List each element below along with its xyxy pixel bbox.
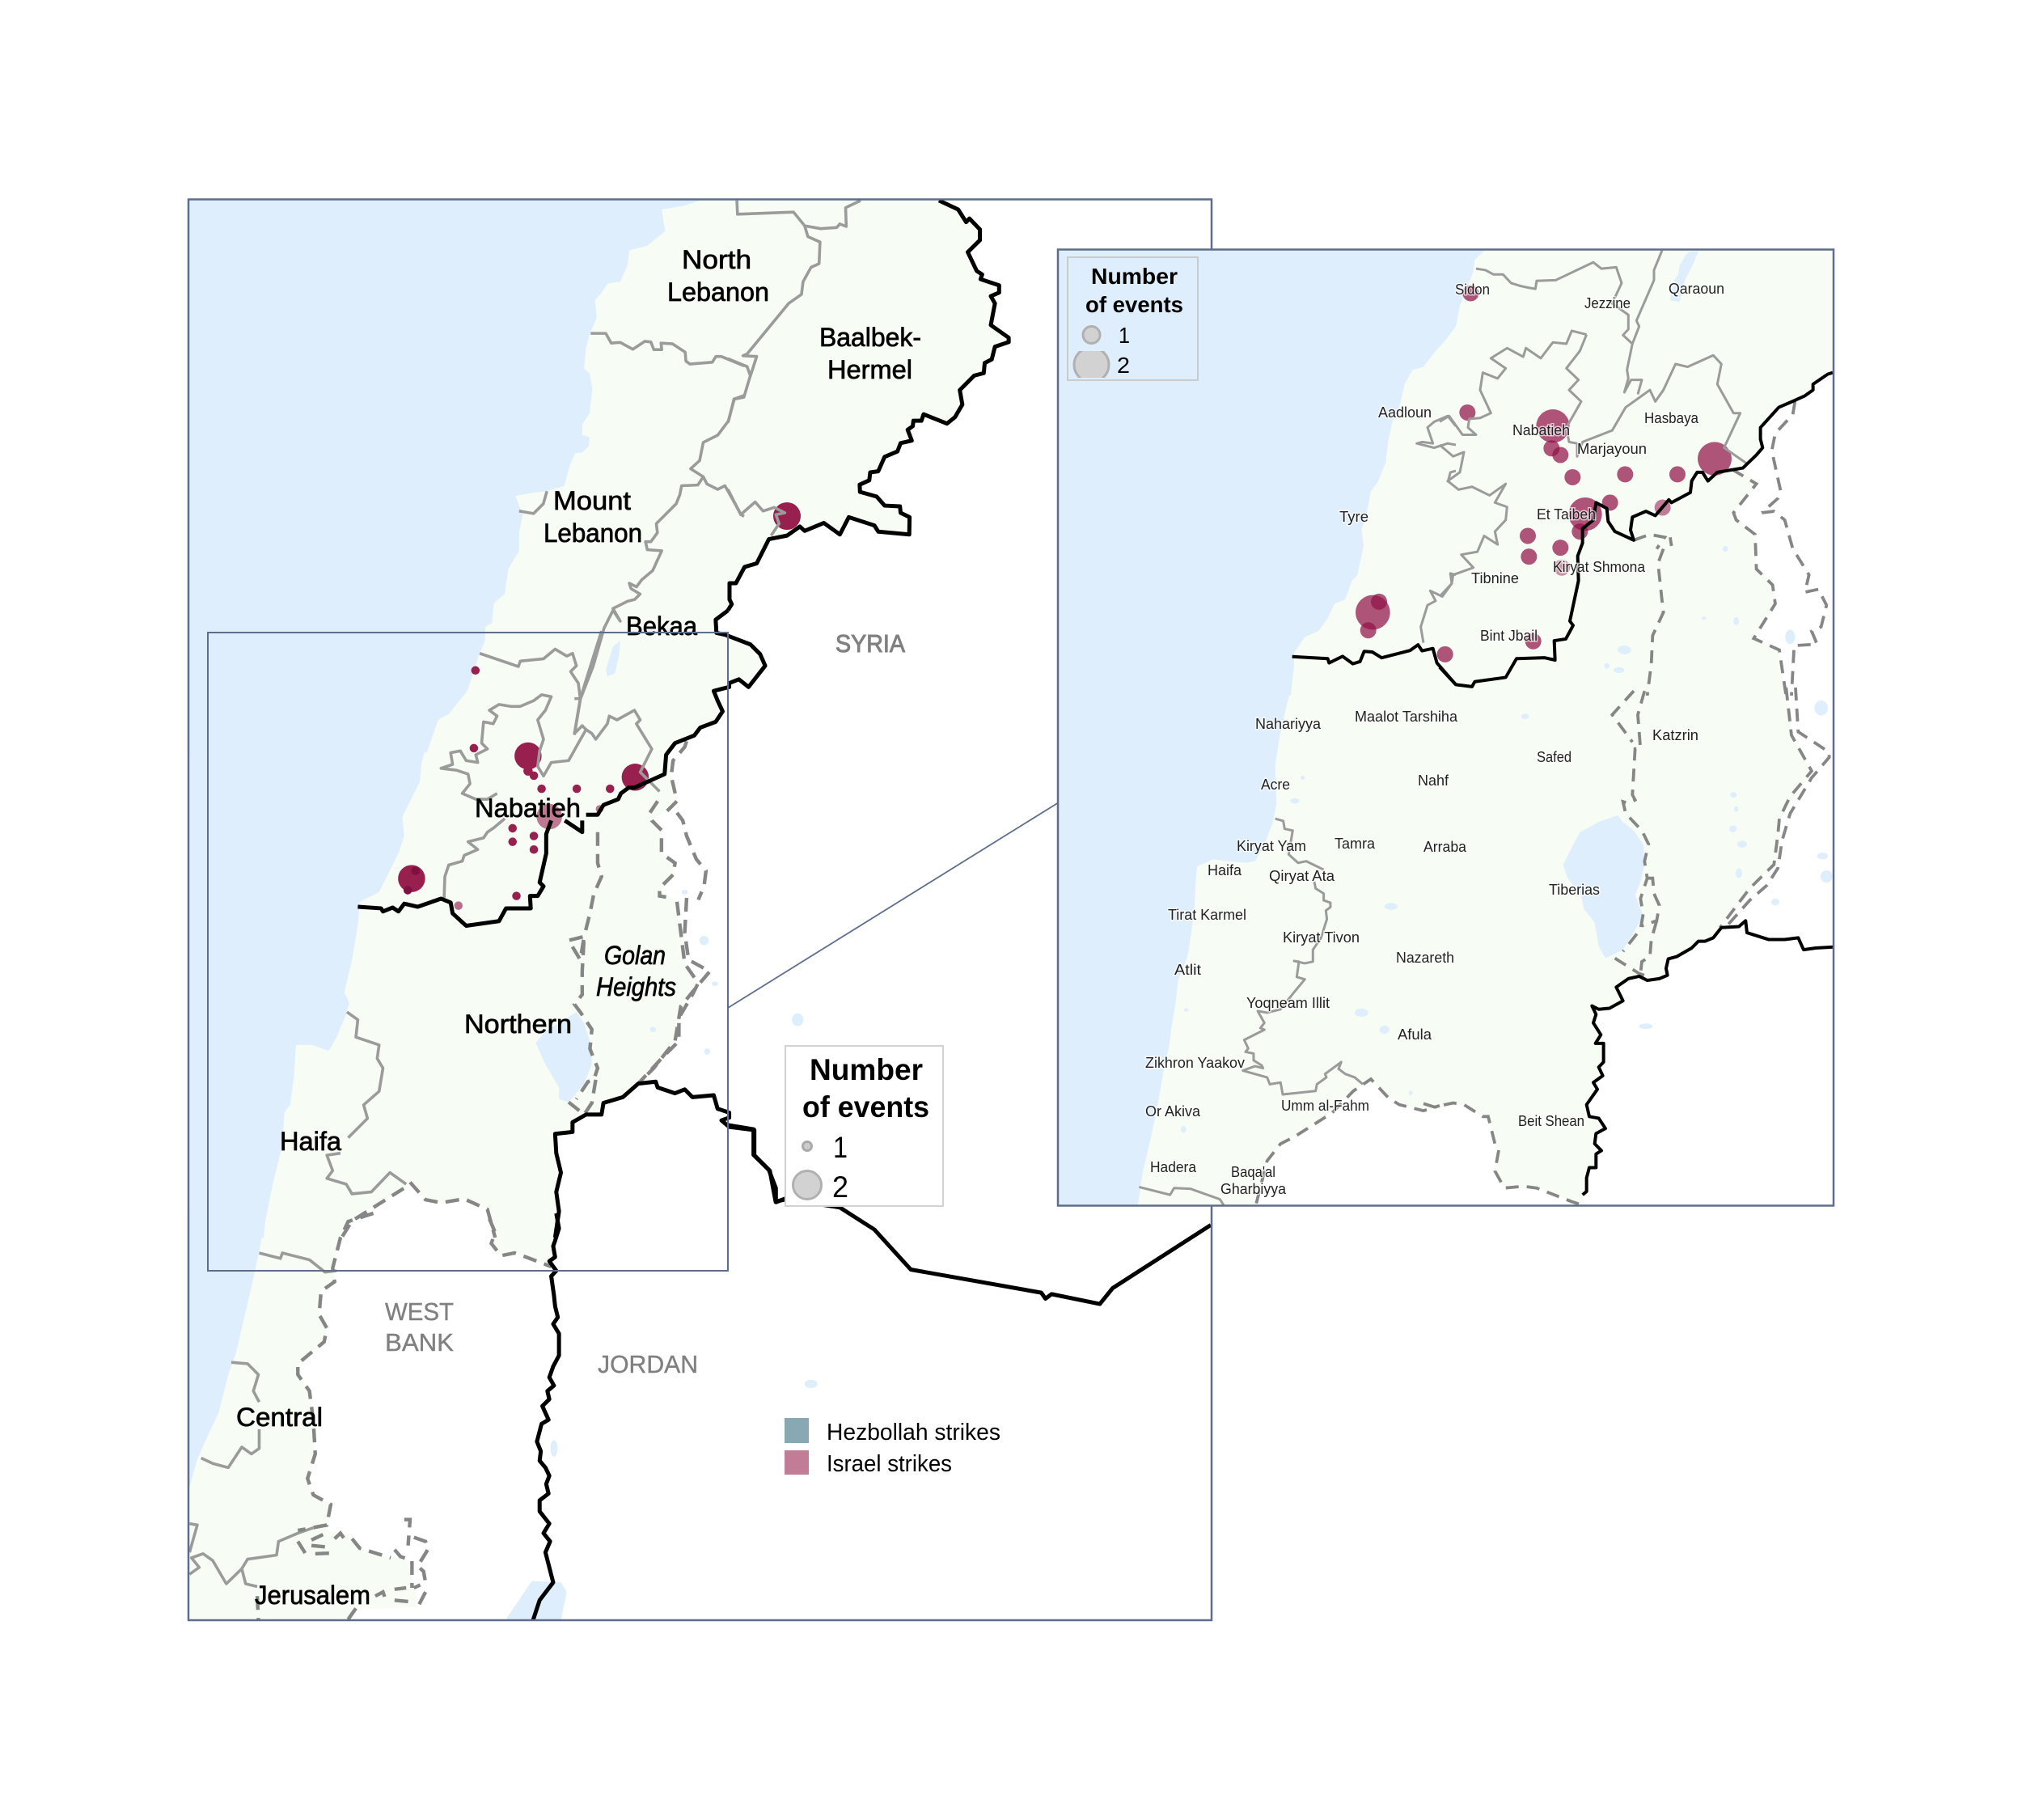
label: Northern: Northern — [464, 1009, 572, 1039]
small lakes in Golan and Syria — [650, 890, 718, 1055]
city: Jezzine: Jezzine — [1584, 295, 1631, 311]
detail sea: lower — [1058, 688, 1292, 1206]
label: Jerusalem: Jerusalem — [255, 1581, 370, 1610]
label: North: North — [682, 245, 751, 274]
small lakes, Golan and Upper Galilee — [1521, 700, 1833, 1029]
detail national border: Jordan — [1583, 921, 1834, 1195]
small lakes in Jordan — [792, 1014, 818, 1388]
Dead Sea — [507, 1581, 567, 1620]
city: Tibnine: Tibnine — [1471, 570, 1519, 586]
city: Baqa'al: Baqa'al — [1231, 1164, 1275, 1180]
land: Baalbek-Hermel — [728, 200, 1009, 611]
small lakes, Haifa area — [1181, 776, 1413, 1133]
legend: number of events, detail map: Number — [1091, 264, 1178, 289]
district boundaries: north — [519, 333, 744, 735]
label: BANK: BANK — [385, 1328, 454, 1357]
city labels on detail map — [1145, 281, 1724, 1197]
city: Nahariyya: Nahariyya — [1255, 716, 1322, 732]
detail district boundaries: Haifa and Hadera — [1139, 819, 1363, 1206]
detail land base — [1058, 249, 1834, 1205]
detail map frame — [1058, 249, 1834, 1205]
label: JORDAN: JORDAN — [598, 1350, 698, 1378]
city: Qaraoun: Qaraoun — [1669, 281, 1724, 297]
city: Gharbiyya: Gharbiyya — [1220, 1181, 1287, 1197]
Syria and Jordan area, south — [1583, 688, 1836, 1208]
label: SYRIA: SYRIA — [835, 629, 905, 658]
label: Golan: Golan — [604, 941, 666, 970]
strike markers: detail map — [1356, 285, 1732, 662]
label: WEST: WEST — [385, 1297, 454, 1326]
West Bank area — [1256, 1079, 1584, 1207]
label: Bekaa: Bekaa — [626, 612, 697, 641]
label: Lebanon (north): Lebanon — [667, 277, 769, 307]
city: Or Akiva: Or Akiva — [1145, 1103, 1201, 1120]
map frame — [188, 199, 1212, 1620]
lake: Qaraoun — [1670, 252, 1698, 302]
legend: number of events, detail map: of events — [1085, 292, 1183, 317]
district boundaries: south Lebanon and Haifa — [327, 631, 659, 1194]
sea: upper Mediterranean — [188, 200, 704, 752]
label: Hermel: Hermel — [827, 355, 912, 384]
city: Zikhron Yaakov: Zikhron Yaakov — [1145, 1055, 1245, 1071]
connector line from inset to detail panel — [728, 802, 1059, 1008]
legend text: Hezbollah strikes: Hezbollah strikes — [827, 1420, 1000, 1445]
land: northern Lebanon — [485, 201, 728, 631]
label: Lebanon (mount): Lebanon — [544, 518, 642, 548]
city: Katzrin: Katzrin — [1652, 727, 1698, 743]
city: Afula: Afula — [1398, 1026, 1432, 1043]
detail national border: Blue Line, west — [1292, 645, 1456, 684]
West Bank, main body — [298, 1213, 559, 1620]
national border: Lebanon-Syria middle and Blue Line — [357, 611, 785, 1238]
city: Hasbaya: Hasbaya — [1644, 410, 1699, 426]
city: Yoqneam Illit: Yoqneam Illit — [1246, 995, 1330, 1011]
city: Acre: Acre — [1261, 777, 1290, 793]
legend text: Israel strikes: Israel strikes — [827, 1451, 952, 1477]
city: Sidon: Sidon — [1455, 281, 1490, 298]
city: Atlit: Atlit — [1174, 962, 1201, 978]
city: Kiryat Yam: Kiryat Yam — [1237, 838, 1306, 854]
city: Umm al-Fahm: Umm al-Fahm — [1281, 1098, 1369, 1114]
legend: number of events, main map: 1 — [833, 1131, 848, 1164]
detail sea: upper — [1058, 250, 1486, 696]
legend: number of events, detail map — [1068, 257, 1198, 382]
detail district boundaries: west of Nabatieh — [1417, 416, 1456, 643]
district boundaries: Baalbek-Hermel — [728, 201, 861, 535]
label: Heights: Heights — [596, 972, 676, 1001]
swatch: Israel strikes — [785, 1450, 809, 1475]
district boundaries: central and Jerusalem — [189, 1253, 336, 1586]
label: Baalbek-: Baalbek- — [819, 323, 921, 352]
detail dashed boundaries: Golan south and West Bank — [1423, 688, 1830, 1205]
city: Kiryat Tivon: Kiryat Tivon — [1283, 929, 1360, 946]
lake: Qaraoun — [606, 641, 620, 676]
map geography: land, sea and boundaries — [188, 200, 1211, 1620]
city: Tamra: Tamra — [1335, 836, 1376, 852]
land: south Lebanon, northern Israel and Golan — [267, 635, 763, 1213]
city: Qiryat Ata: Qiryat Ata — [1269, 868, 1335, 884]
panel: main regional map — [188, 199, 1212, 1620]
region labels on main map — [236, 245, 921, 1610]
lake: Sea of Galilee — [1563, 815, 1644, 959]
legend: number of events, main map — [785, 1046, 943, 1206]
city: Beit Shean: Beit Shean — [1518, 1113, 1584, 1129]
panel: detail map of south Lebanon and northern Israel — [1058, 249, 1836, 1208]
city: Safed: Safed — [1537, 749, 1571, 765]
city: Maalot Tarshiha: Maalot Tarshiha — [1355, 709, 1458, 725]
city: Arraba: Arraba — [1423, 839, 1467, 855]
dashed boundaries: Golan Heights — [342, 741, 710, 1238]
strike marker: Bekaa — [773, 502, 801, 530]
detail dashed boundaries: Golan north — [1634, 401, 1826, 696]
city: Nabatieh: Nabatieh — [1512, 422, 1570, 438]
legend: number of events, detail map: 2 — [1117, 353, 1130, 378]
dashed boundaries: West Bank — [257, 1213, 552, 1620]
city: Et Taibeh: Et Taibeh — [1537, 506, 1596, 523]
city: Nazareth: Nazareth — [1396, 950, 1454, 966]
national border: Israel-Jordan — [533, 1213, 559, 1620]
detail map geography — [1058, 249, 1836, 1208]
label: Central: Central — [236, 1403, 323, 1432]
national border: Syria-Jordan — [728, 1125, 1211, 1304]
label: Haifa: Haifa — [280, 1127, 341, 1156]
city: Tirat Karmel: Tirat Karmel — [1168, 907, 1246, 923]
swatch: Hezbollah strikes — [785, 1418, 809, 1443]
small lakes, north Golan — [1604, 546, 1795, 673]
detail national border: Blue Line and Syria, east — [1440, 373, 1833, 687]
city: Marjayoun: Marjayoun — [1577, 441, 1647, 457]
Syria area, north — [1733, 373, 1836, 697]
lake: Sea of Galilee — [535, 1012, 592, 1103]
city: Tiberias: Tiberias — [1549, 882, 1600, 898]
city: Bint Jbail: Bint Jbail — [1480, 628, 1538, 644]
city: Nahf: Nahf — [1418, 772, 1449, 789]
land: central Israel — [188, 1213, 559, 1620]
city: Haifa: Haifa — [1208, 862, 1242, 878]
strike markers: Israel strikes in main map — [398, 667, 649, 910]
detail district boundaries: north — [1440, 251, 1747, 596]
city: Aadloun: Aadloun — [1378, 404, 1432, 421]
legend: number of events, main map: Number — [810, 1053, 923, 1086]
West Bank, northern bulge — [367, 1184, 495, 1238]
small lake near the Jordan border — [551, 1441, 557, 1457]
national border: Lebanon-Syria upper — [728, 201, 1009, 611]
label: Nabatieh: Nabatieh — [475, 794, 581, 823]
legend: number of events, main map: 2 — [832, 1170, 848, 1204]
city: Kiryat Shmona: Kiryat Shmona — [1553, 559, 1646, 575]
detail dashed boundary: West Bank north-west — [1256, 1079, 1440, 1204]
legend: number of events, main map: of events — [802, 1090, 929, 1124]
inset extent rectangle — [208, 633, 728, 1271]
sea: middle Mediterranean — [189, 631, 485, 1238]
city: Hadera: Hadera — [1150, 1159, 1197, 1175]
label: Mount: Mount — [553, 486, 631, 515]
legend: strike types — [785, 1418, 1000, 1477]
sea: lower Mediterranean — [189, 1238, 262, 1487]
city: Tyre: Tyre — [1339, 509, 1368, 525]
legend: number of events, detail map: 1 — [1119, 323, 1130, 348]
